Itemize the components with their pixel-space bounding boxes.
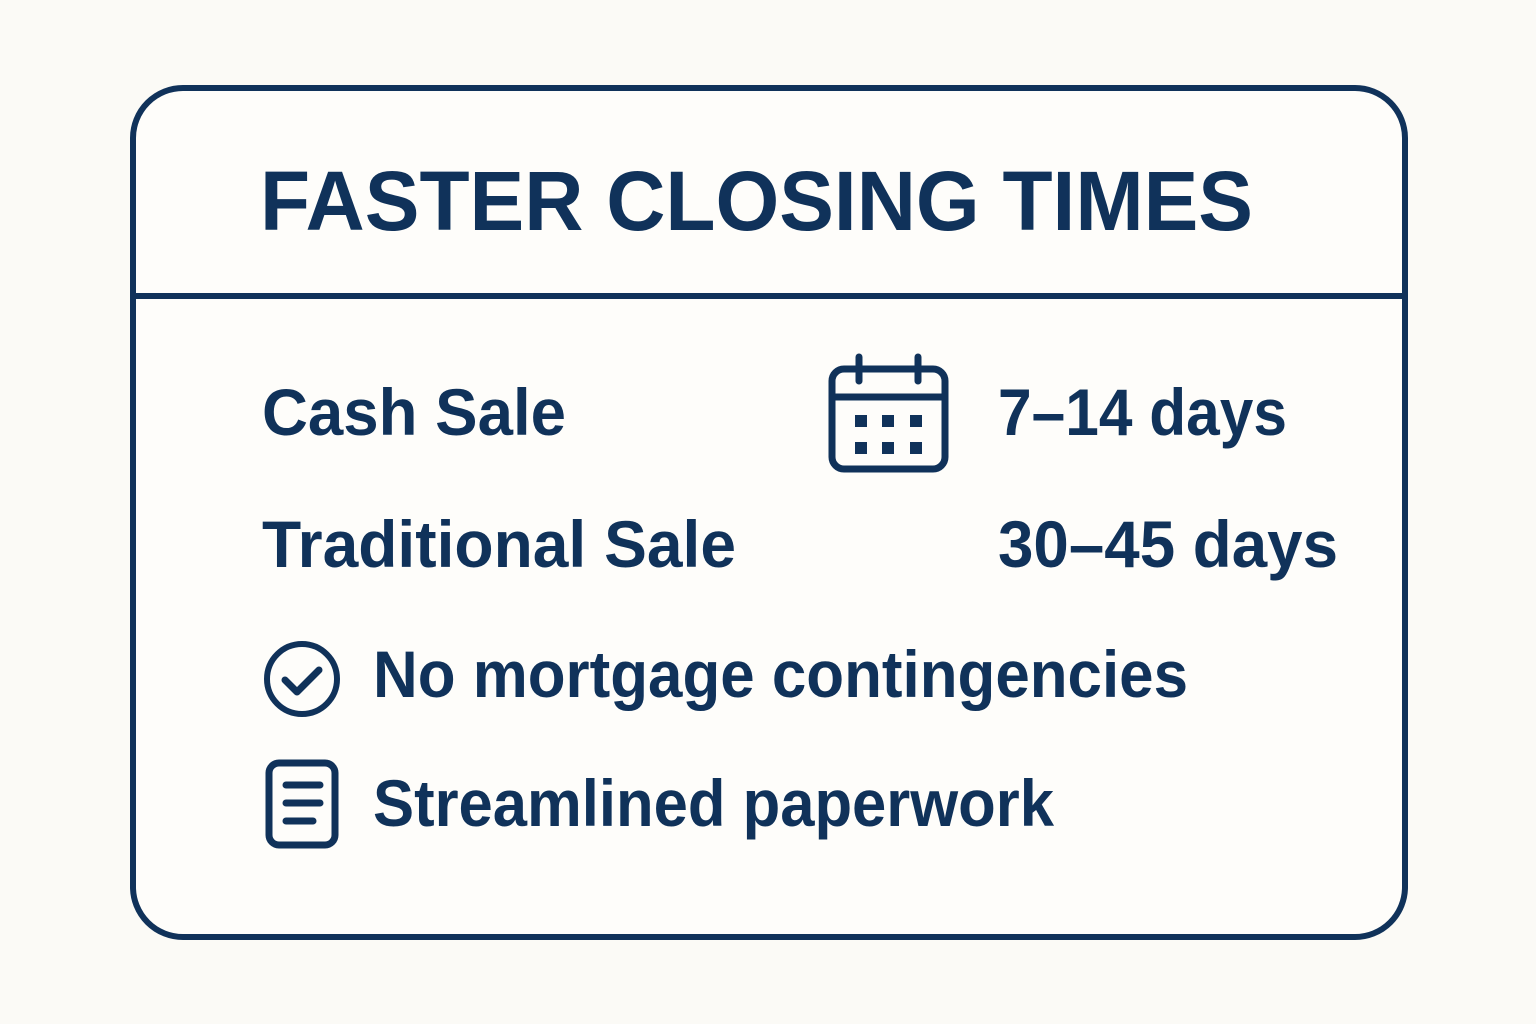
value: cash sale days: 7–14 days (998, 375, 1287, 449)
value: traditional sale days: 30–45 days (998, 507, 1338, 581)
panel: card (133, 88, 1405, 937)
text: streamlined paperwork: Streamlined paperwork (373, 766, 1054, 840)
icon: calendar (832, 357, 945, 469)
label: traditional sale: Traditional Sale (262, 507, 736, 581)
icon: document (269, 763, 335, 845)
label: cash sale: Cash Sale (262, 375, 566, 449)
title: FASTER CLOSING TIMES (260, 154, 1253, 248)
icon: check circle (267, 644, 337, 714)
text: no mortgage contingencies: No mortgage contingencies (373, 637, 1188, 711)
